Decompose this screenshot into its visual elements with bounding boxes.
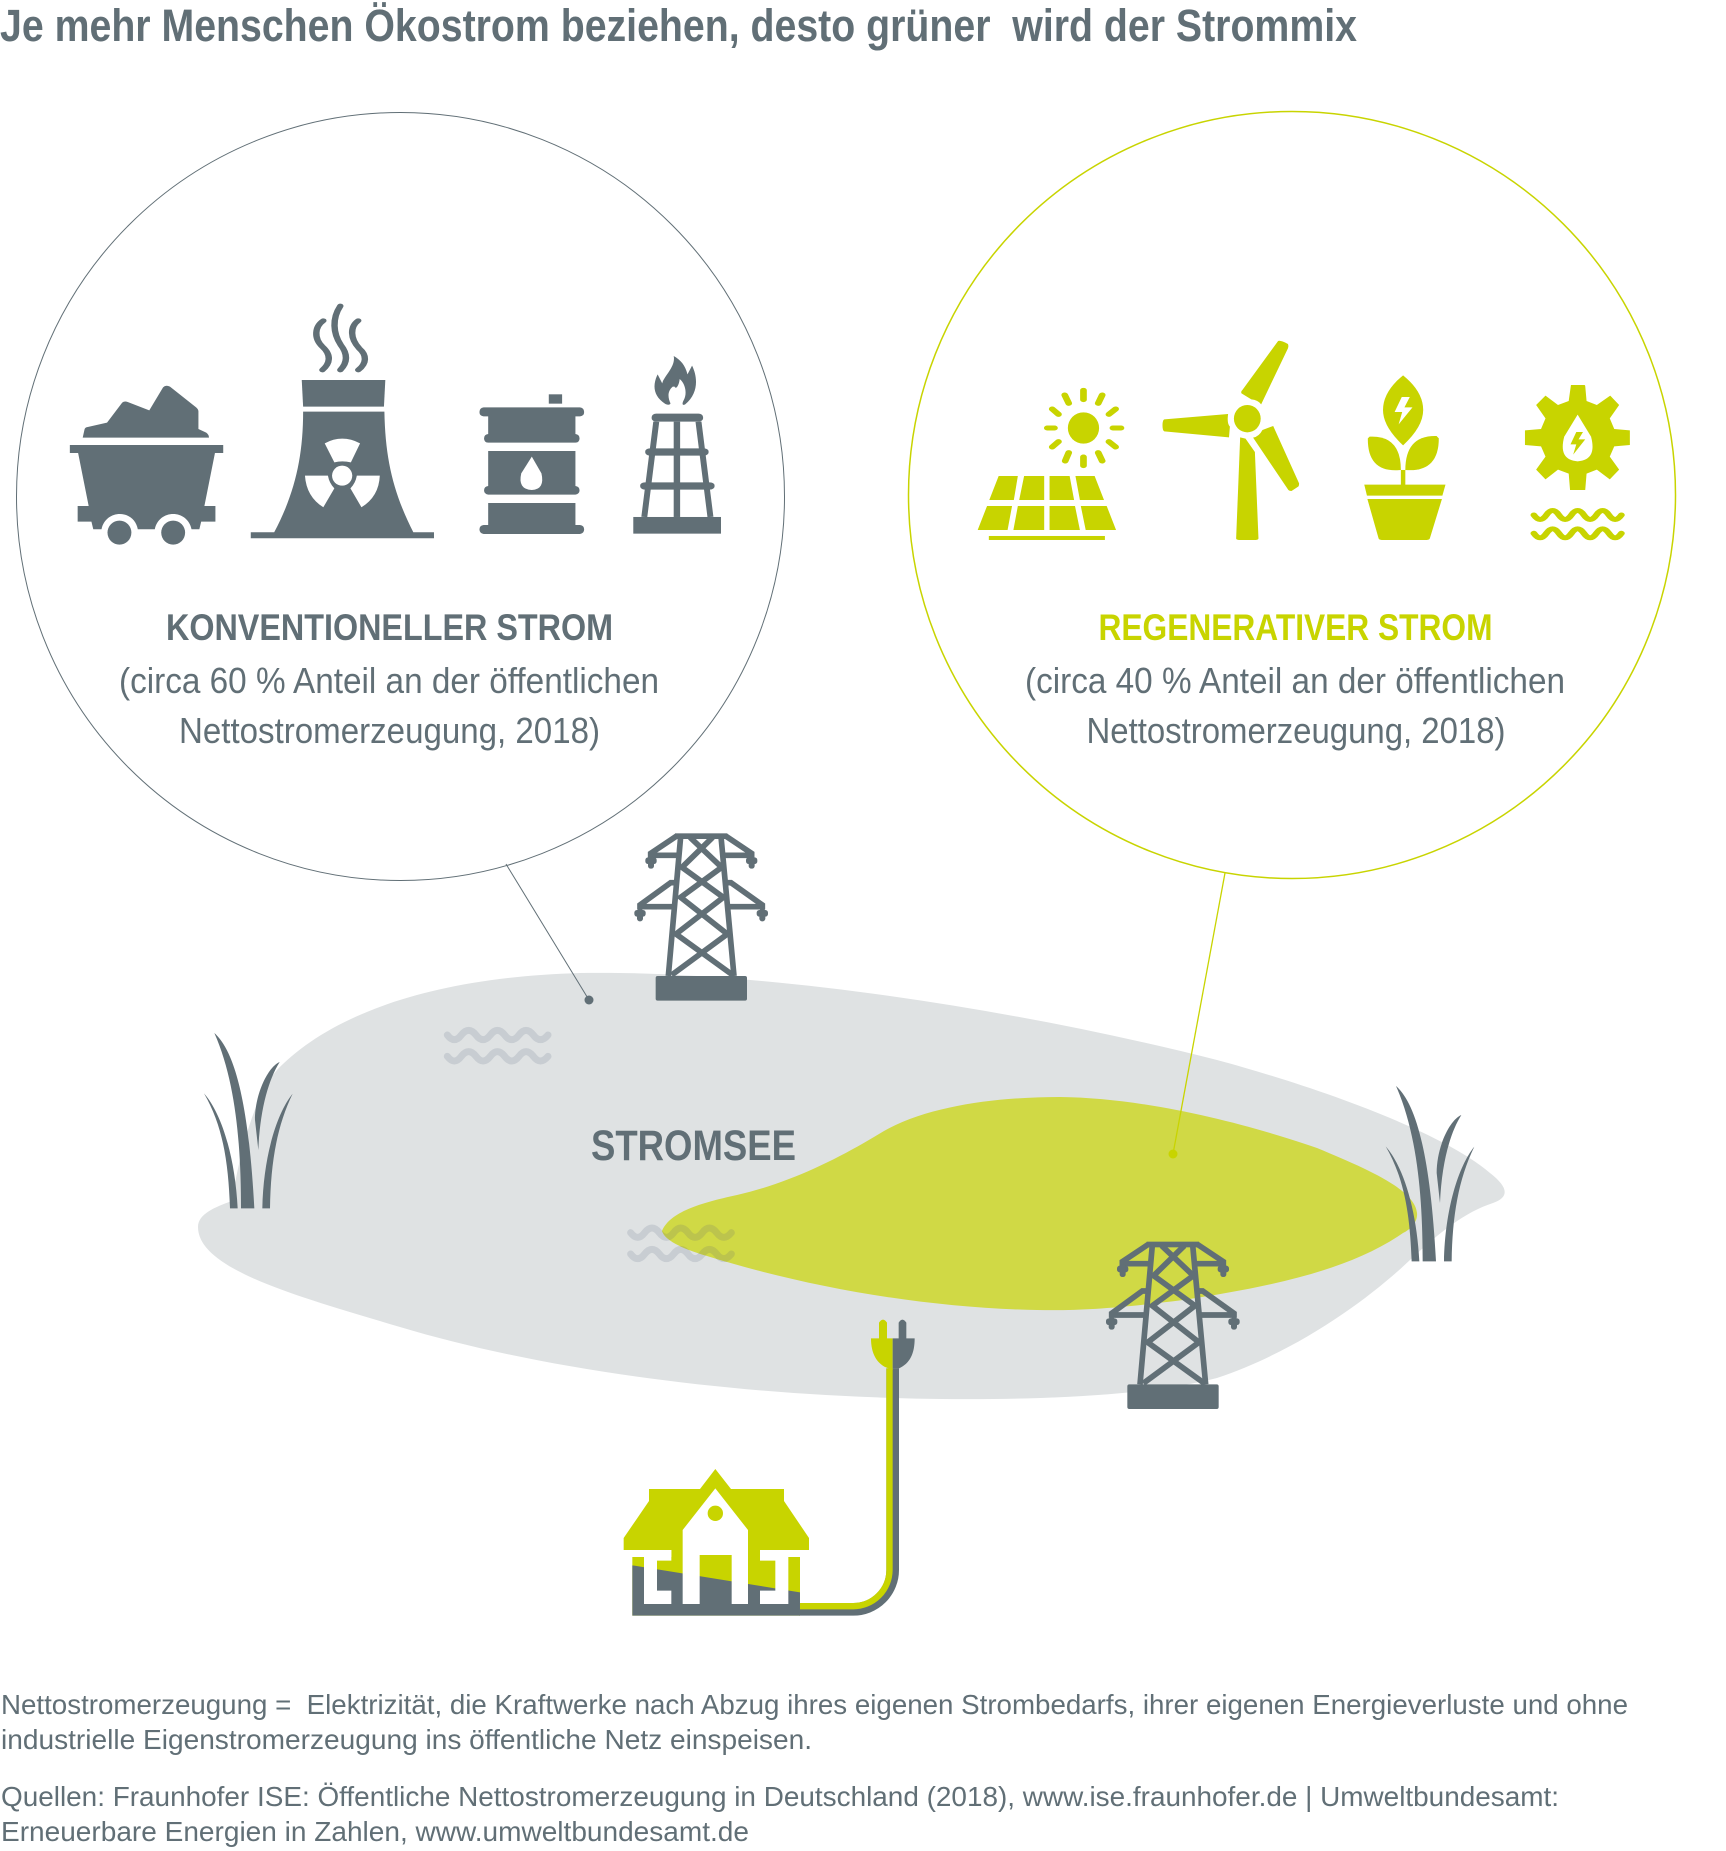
cable — [799, 1368, 893, 1609]
panel: renewable power circle — [908, 112, 1676, 878]
heading: renewable power: REGENERATIVER STROM — [1098, 607, 1492, 648]
lake: Stromsee — [198, 973, 1505, 1399]
icon: reeds right — [1386, 1086, 1474, 1261]
icon: nuclear cooling tower — [251, 306, 434, 538]
house — [624, 1469, 809, 1616]
text: conventional share line 1: (circa 60 % Anteil an der öffentlichen — [119, 660, 659, 701]
callout: renewable pointer — [1168, 873, 1225, 1158]
panel: conventional power circle — [16, 112, 784, 880]
icon: gas flare rig — [633, 356, 721, 534]
waves: lower lake — [631, 1228, 731, 1259]
callout: conventional pointer — [506, 864, 594, 1004]
icon: house with cable and plug — [624, 1320, 915, 1616]
icon: solar panel with sun — [978, 390, 1121, 540]
icon: reeds left — [204, 1033, 293, 1208]
footnote: definition — [1, 1689, 1628, 1755]
waves: upper lake — [447, 1030, 548, 1061]
text: conventional share line 2: Nettostromerzeugung, 2018) — [179, 710, 600, 751]
icon: biomass plant in pot — [1364, 375, 1446, 540]
waves: overlap on green area — [662, 1224, 735, 1262]
footnote: sources — [1, 1781, 1559, 1847]
icons: renewable energy — [978, 341, 1630, 540]
footnote: sources: Erneuerbare Energien in Zahlen, www.umweltbundesamt.de — [1, 1816, 749, 1847]
icon: hydropower gear with waves — [1525, 385, 1630, 538]
icon: wind turbine — [1162, 341, 1299, 540]
icon: oil barrel — [479, 394, 584, 534]
lake label: STROMSEE — [591, 1122, 796, 1170]
icon: pylon upper — [634, 833, 768, 1001]
plug — [871, 1320, 915, 1370]
text: renewable share line 2: Nettostromerzeugung, 2018) — [1086, 710, 1506, 751]
footnote: definition: Nettostromerzeugung = Elektrizität, die Kraftwerke nach Abzug ihres eigenen Strombedarfs, ihrer eigenen Energieverluste und ohne — [1, 1689, 1628, 1720]
icon: pylon lower — [1106, 1242, 1240, 1409]
heading: conventional power: KONVENTIONELLER STROM — [166, 607, 613, 648]
icons: conventional energy — [70, 306, 721, 545]
footnote: sources: Quellen: Fraunhofer ISE: Öffentliche Nettostromerzeugung in Deutschland (2018), www.ise.fraunhofer.de | Umweltbundesamt: — [1, 1781, 1559, 1812]
text: renewable share line 1: (circa 40 % Anteil an der öffentlichen — [1025, 660, 1565, 701]
lake: green electricity area — [662, 1097, 1417, 1310]
icon: coal cart — [70, 386, 223, 545]
title: Je mehr Menschen Ökostrom beziehen, desto grüner wird der Strommix — [0, 0, 1357, 51]
footnote: definition: industrielle Eigenstromerzeugung ins öffentliche Netz einspeisen. — [1, 1724, 812, 1755]
